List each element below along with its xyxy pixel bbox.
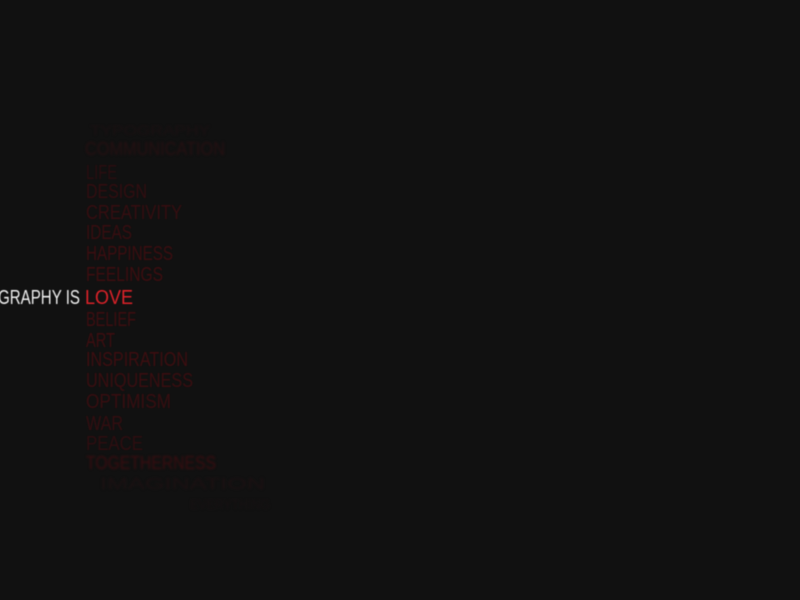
word: war: WAR	[86, 413, 123, 435]
word: faint second line: COMMUNICATION	[85, 139, 225, 159]
word: happiness: HAPPINESS	[86, 243, 173, 265]
headline: typography is love	[0, 287, 133, 309]
word: optimism: OPTIMISM	[86, 391, 171, 413]
word: art: ART	[86, 330, 115, 352]
word: faint lower line: IMAGINATION	[100, 476, 265, 493]
word: feelings: FEELINGS	[86, 264, 163, 286]
word: belief: BELIEF	[86, 309, 136, 331]
word: faint top line: TYPOGRAPHY	[90, 122, 211, 138]
word: creativity: CREATIVITY	[86, 202, 182, 224]
faded word list above	[86, 162, 182, 286]
word: faintest lower line: EVERYTHING	[190, 496, 270, 512]
word: ideas: IDEAS	[86, 222, 132, 244]
faint words at the bottom of the list	[86, 453, 270, 512]
word: uniqueness: UNIQUENESS	[86, 370, 193, 392]
word: design: DESIGN	[86, 181, 147, 203]
word: peace: PEACE	[86, 433, 143, 455]
word: togetherness: TOGETHERNESS	[86, 453, 216, 473]
faded word list below	[86, 309, 193, 455]
word: inspiration: INSPIRATION	[86, 349, 188, 371]
faint words at the top of the list	[85, 122, 225, 159]
highlighted word: love: LOVE	[85, 287, 133, 309]
word: life: LIFE	[86, 162, 117, 184]
headline lead-in: GRAPHY IS	[0, 287, 80, 309]
